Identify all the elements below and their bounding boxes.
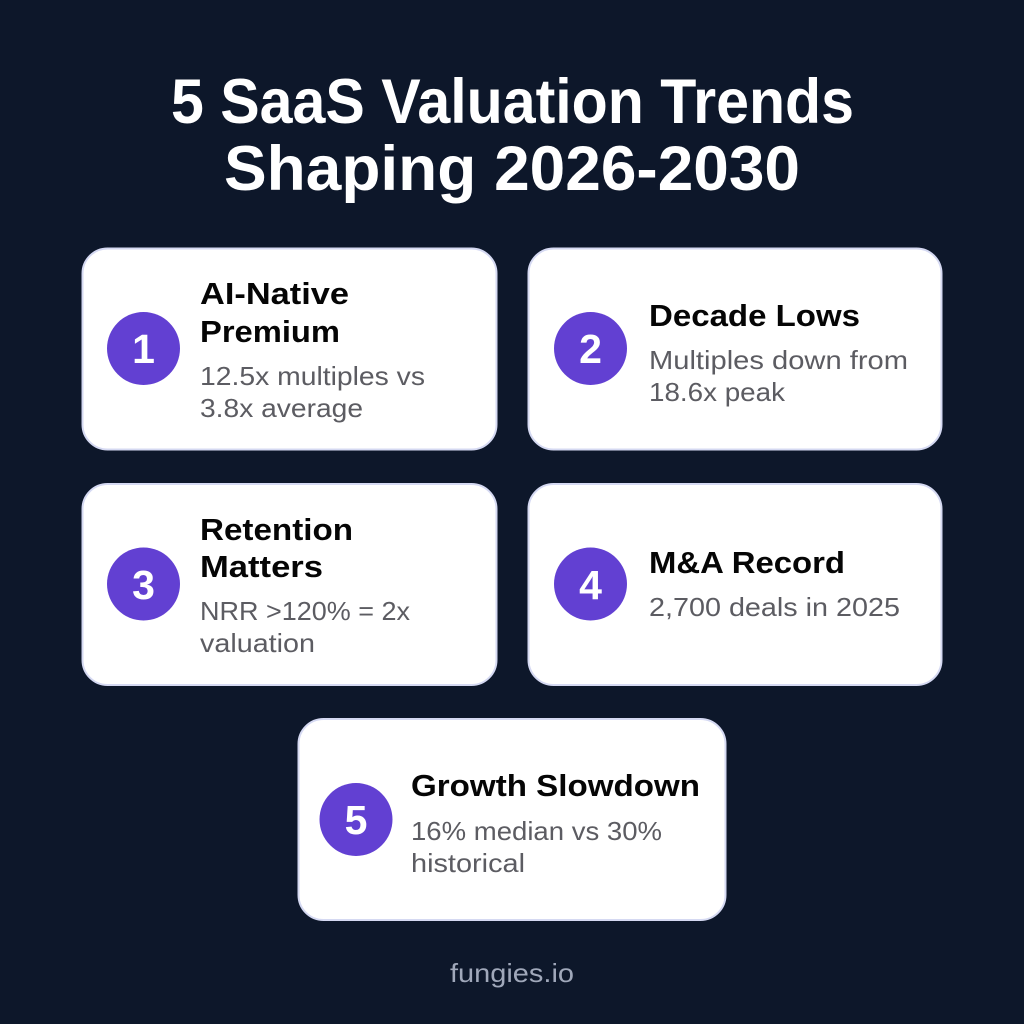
icon: number badge 1: 1 [132,326,155,372]
heading: Retention Matters: Retention [200,512,353,547]
footer: brand: fungies.io [450,958,574,988]
title [171,67,854,204]
text: trend 2 detail: Multiples down from [649,345,908,375]
text: trend 2 detail [649,345,908,407]
text: trend 5 detail: historical [411,848,525,878]
text: trend 2 detail: 18.6x peak [649,377,786,407]
panel: trend 3 Retention Matters [82,484,496,685]
icon: number badge 5: 5 [345,797,367,843]
heading: AI-Native Premium: Premium [200,314,340,349]
heading: AI-Native Premium: AI-Native [200,276,349,311]
panel: trend 4 M&A Record [528,484,942,685]
icon: number badge 3: 3 [132,562,155,608]
heading: M&A Record: M&A Record [649,545,845,580]
text: trend 3 detail [200,596,410,658]
icon: number badge 3 [107,548,180,620]
text: trend 3 detail: NRR >120% = 2x [200,596,410,626]
panel: trend 1 AI-Native Premium [82,248,496,450]
panel: trend 5 Growth Slowdown [298,719,726,920]
icon: number badge 2: 2 [579,326,602,372]
text: trend 3 detail: valuation [200,628,315,658]
text: trend 1 detail: 12.5x multiples vs [200,361,425,391]
heading: Growth Slowdown: Growth Slowdown [411,768,700,803]
icon: number badge 5 [320,783,392,856]
icon: number badge 4 [554,548,627,620]
text: trend 1 detail: 3.8x average [200,393,363,423]
icon: number badge 1 [107,312,180,385]
text: trend 5 detail [411,816,662,878]
title: Shaping 2026-2030 [224,134,800,204]
icon: number badge 4: 4 [579,562,602,608]
heading: AI-Native Premium [200,276,349,349]
heading: Retention Matters [200,512,353,584]
icon: number badge 2 [554,312,627,385]
text: trend 5 detail: 16% median vs 30% [411,816,662,846]
heading: Retention Matters: Matters [200,549,323,584]
text: trend 4 detail: 2,700 deals in 2025 [649,592,900,622]
text: trend 1 detail [200,361,425,423]
heading: Decade Lows: Decade Lows [649,298,860,333]
panel: trend 2 Decade Lows [528,248,942,450]
title: 5 SaaS Valuation Trends [171,67,854,137]
